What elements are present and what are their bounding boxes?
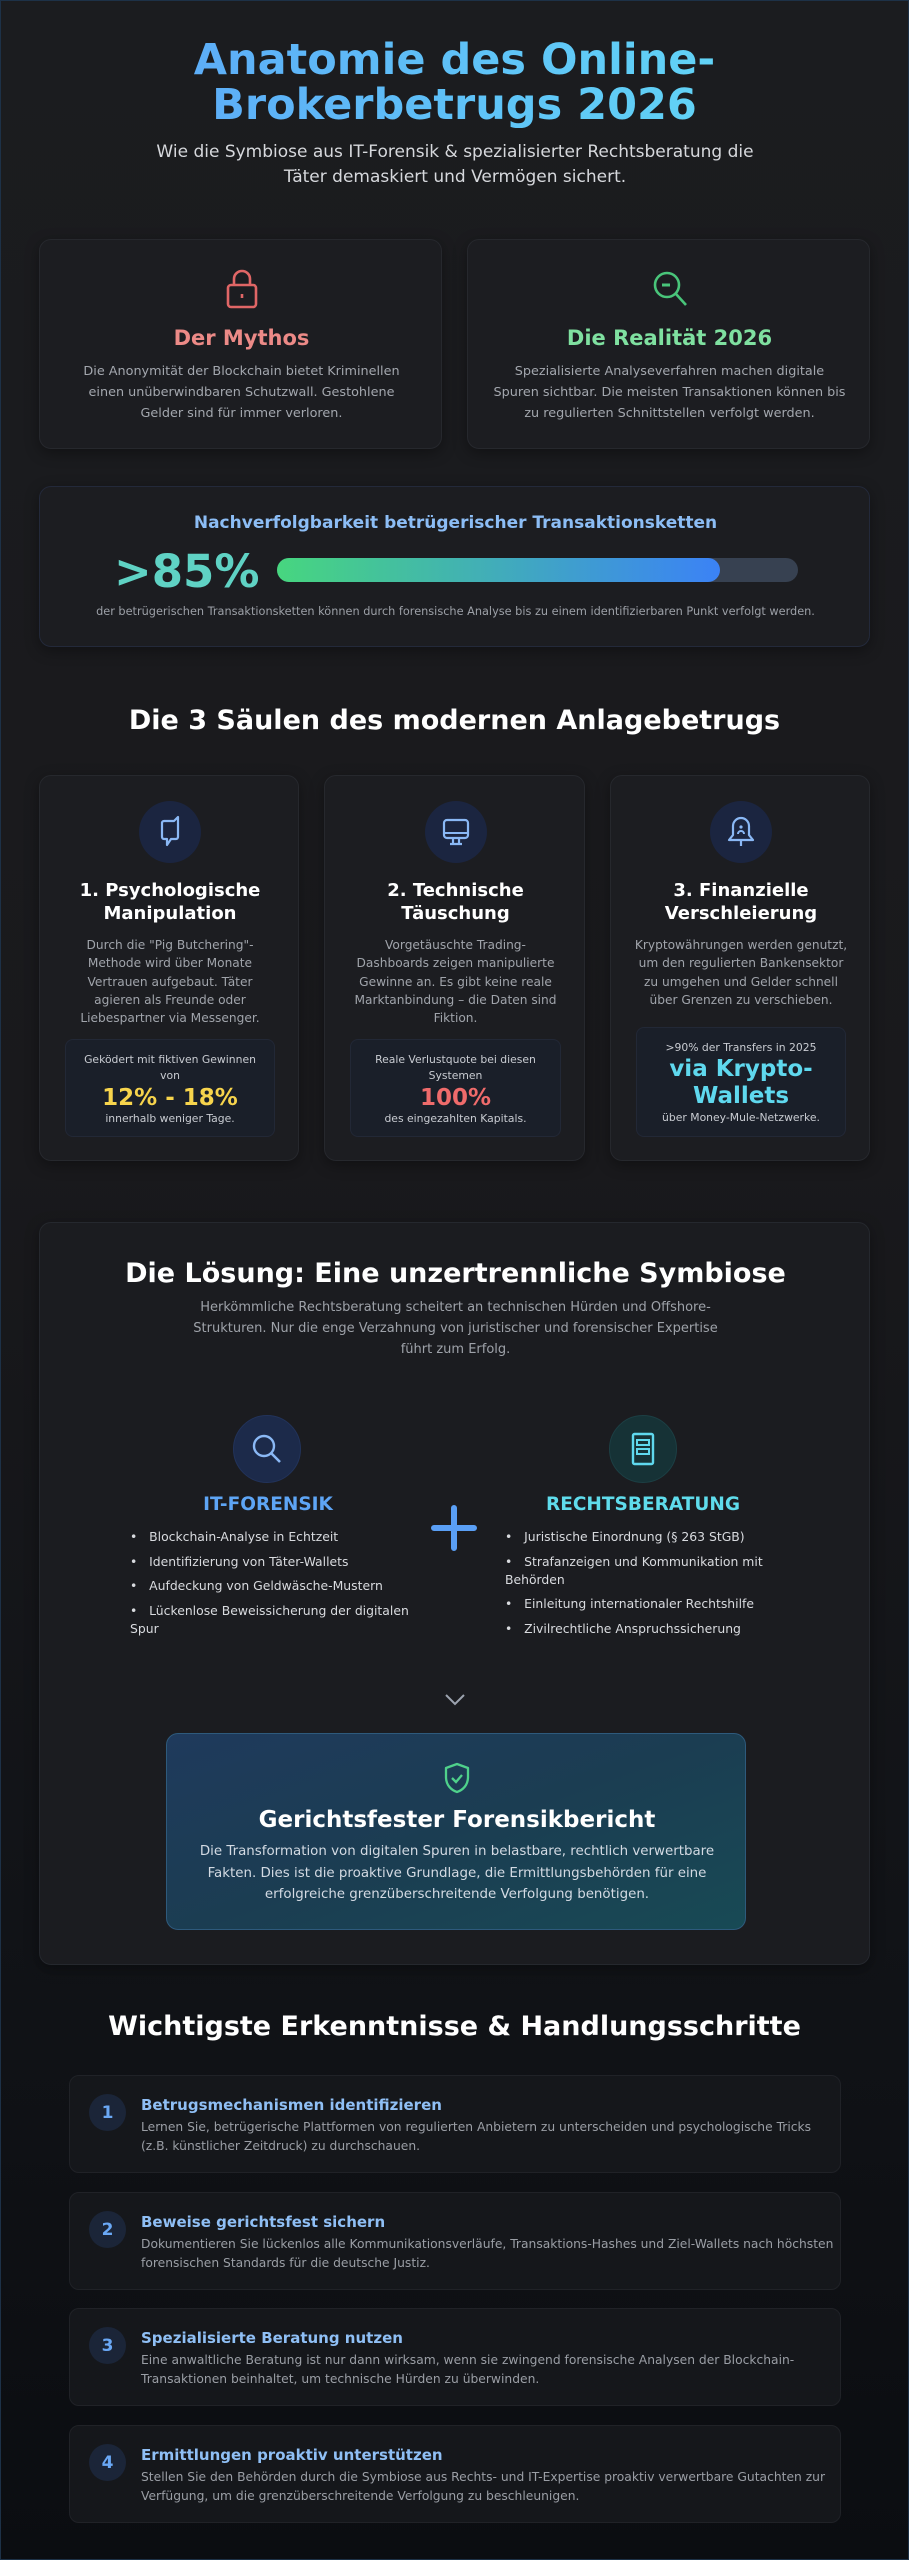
step 2: Dokumentieren Sie lückenlos alle Kommunikationsverläufe, Transaktions-Hashes und Ziel-Wallets nach höchsten forensischen Standards für die deutsche Justiz.: [141, 2237, 833, 2270]
column: IT-Forensik: [130, 1415, 409, 1636]
heading: reality: Die Realität 2026: [567, 326, 772, 350]
icon: chat: [139, 801, 201, 863]
step 3: Spezialisierte Beratung nutzen: [141, 2329, 403, 2347]
stat box: 12% - 18%: [102, 1085, 238, 1111]
subtitle: Täter demaskiert und Vermögen sichert.: [284, 167, 626, 187]
panel: pillar 1: [39, 775, 299, 1161]
title: 2. Technische Täuschung: [387, 880, 524, 924]
arrow: chevron down: [445, 1694, 465, 1706]
title: Anatomie des Online-: [194, 35, 715, 85]
list: • Lückenlose Beweissicherung der digitalen Spur: [130, 1602, 409, 1636]
title: Brokerbetrugs 2026: [212, 80, 697, 130]
panel: reality: [467, 239, 870, 449]
step 2: 2: [102, 2220, 113, 2240]
stat box: [636, 1027, 846, 1137]
description: Vorgetäuschte Trading-Dashboards zeigen manipulierte Gewinne an. Es gibt keine reale Marktanbindung – die Daten sind Fiktion.: [354, 938, 557, 1025]
text: reality: Spezialisierte Analyseverfahren machen digitale Spuren sichtbar. Die meisten Transaktionen können bis zu regulierten Schnittstellen verfolgt werden.: [494, 364, 845, 421]
text: myth: Die Anonymität der Blockchain bietet Kriminellen einen unüberwindbaren Schutzwall. Gestohlene Gelder sind für immer verloren.: [83, 364, 400, 421]
stat box: [65, 1039, 275, 1137]
heading: pillars: Die 3 Säulen des modernen Anlagebetrugs: [129, 705, 780, 736]
label: IT-FORENSIK: [203, 1494, 333, 1515]
panel: pillar 2: [324, 775, 585, 1161]
caption: der betrügerischen Transaktionsketten können durch forensische Analyse bis zu einem identifizierbaren Punkt verfolgt werden.: [96, 605, 815, 618]
list: • Identifizierung von Täter-Wallets: [130, 1554, 348, 1568]
icon: document: [609, 1415, 677, 1483]
step 2: Beweise gerichtsfest sichern: [141, 2213, 385, 2231]
step 2: [69, 2192, 841, 2290]
list: • Einleitung internationaler Rechtshilfe: [505, 1596, 754, 1611]
stat box: von: [160, 1069, 180, 1082]
description: Durch die "Pig Butchering"-Methode wird über Monate Vertrauen aufgebaut. Täter agieren als Freunde oder Liebespartner via Messenger.: [80, 938, 260, 1025]
bar chart: [277, 558, 798, 582]
stat box: Wallets: [693, 1083, 789, 1109]
list: • Aufdeckung von Geldwäsche-Mustern: [130, 1578, 383, 1593]
step 4: 4: [102, 2452, 113, 2472]
intro text: Herkömmliche Rechtsberatung scheitert an technischen Hürden und Offshore-Strukturen. Nur die enge Verzahnung von juristischer und forensischer Expertise führt zum Erfolg.: [193, 1300, 718, 1357]
step 3: [69, 2308, 841, 2406]
big number: >85%: [114, 545, 259, 598]
title: 3. Finanzielle Verschleierung: [665, 880, 817, 924]
text: Die Transformation von digitalen Spuren in belastbare, rechtlich verwertbare Fakten. Dies ist die proaktive Grundlage, die Ermittlungsbehörden für eine erfolgreiche grenzüberschreitende Verfolgung benötigen.: [200, 1844, 714, 1902]
icon: monitor: [425, 801, 487, 863]
stat box: >90% der Transfers in 2025: [665, 1041, 817, 1054]
stat box: innerhalb weniger Tage.: [105, 1112, 235, 1125]
step 3: 3: [102, 2336, 113, 2356]
list: [505, 1529, 763, 1636]
heading: takeaways: Wichtigste Erkenntnisse & Handlungsschritte: [108, 2011, 801, 2042]
icon: magnifier: [654, 272, 687, 306]
list: • Strafanzeigen und Kommunikation mit Behörden: [505, 1554, 763, 1586]
step 1: Lernen Sie, betrügerische Plattformen von regulierten Anbietern zu unterscheiden und psychologische Tricks (z.B. künstlicher Zeitdruck) zu durchschauen.: [141, 2120, 811, 2153]
stat box: über Money-Mule-Netzwerke.: [662, 1111, 820, 1124]
icon: lock: [226, 270, 258, 308]
heading: myth: Der Mythos: [174, 326, 309, 350]
list: • Juristische Einordnung (§ 263 StGB): [505, 1529, 745, 1544]
stat box: [350, 1039, 561, 1137]
stat box: Systemen: [429, 1069, 482, 1082]
icon: shield: [444, 1762, 470, 1794]
heading: stat: Nachverfolgbarkeit betrügerischer Transaktionsketten: [194, 513, 717, 533]
column: Rechtsberatung: [505, 1415, 763, 1636]
heading: solution: Die Lösung: Eine unzertrennliche Symbiose: [125, 1258, 786, 1289]
icon: search: [233, 1415, 301, 1483]
description: Kryptowährungen werden genutzt, um den regulierten Bankensektor zu umgehen und Gelder schnell über Grenzen zu verschieben.: [635, 938, 847, 1007]
subtitle: Wie die Symbiose aus IT-Forensik & spezialisierter Rechtsberatung die: [156, 142, 754, 162]
step 3: Eine anwaltliche Beratung ist nur dann wirksam, wenn sie zwingend forensische Analysen der Blockchain-Transaktionen beinhaltet, um technische Hürden zu überwinden.: [141, 2353, 794, 2386]
icon: plus: [431, 1505, 477, 1551]
stat box: via Krypto-: [669, 1056, 813, 1082]
stat box: Geködert mit fiktiven Gewinnen: [84, 1053, 256, 1066]
stat box: 100%: [420, 1085, 491, 1111]
title: 1. Psychologische Manipulation: [80, 880, 260, 924]
panel: solution: [39, 1222, 870, 1965]
step 4: Stellen Sie den Behörden durch die Symbiose aus Rechts- und IT-Expertise proaktiv verwertbare Gutachten zur Verfügung, um die grenzüberschreitende Verfolgung zu beschleunigen.: [141, 2470, 825, 2503]
subtitle: [156, 142, 754, 187]
icon: bell: [710, 801, 772, 863]
panel: traceability stat: [39, 486, 870, 647]
step 4: Ermittlungen proaktiv unterstützen: [141, 2446, 443, 2464]
stat box: des eingezahlten Kapitals.: [384, 1112, 527, 1125]
step 1: Betrugsmechanismen identifizieren: [141, 2096, 442, 2114]
callout: forensic report: [166, 1733, 746, 1930]
stat box: Reale Verlustquote bei diesen: [375, 1053, 536, 1066]
step 4: [69, 2425, 841, 2523]
panel: pillar 3: [610, 775, 870, 1161]
step 1: [69, 2075, 841, 2173]
title: [1, 38, 908, 128]
list: [130, 1529, 409, 1636]
label: RECHTSBERATUNG: [546, 1494, 740, 1515]
list: • Zivilrechtliche Anspruchssicherung: [505, 1620, 741, 1636]
panel: myth: [39, 239, 442, 449]
step 1: 1: [102, 2102, 113, 2122]
list: • Blockchain-Analyse in Echtzeit: [130, 1529, 338, 1544]
heading: Gerichtsfester Forensikbericht: [259, 1807, 655, 1833]
